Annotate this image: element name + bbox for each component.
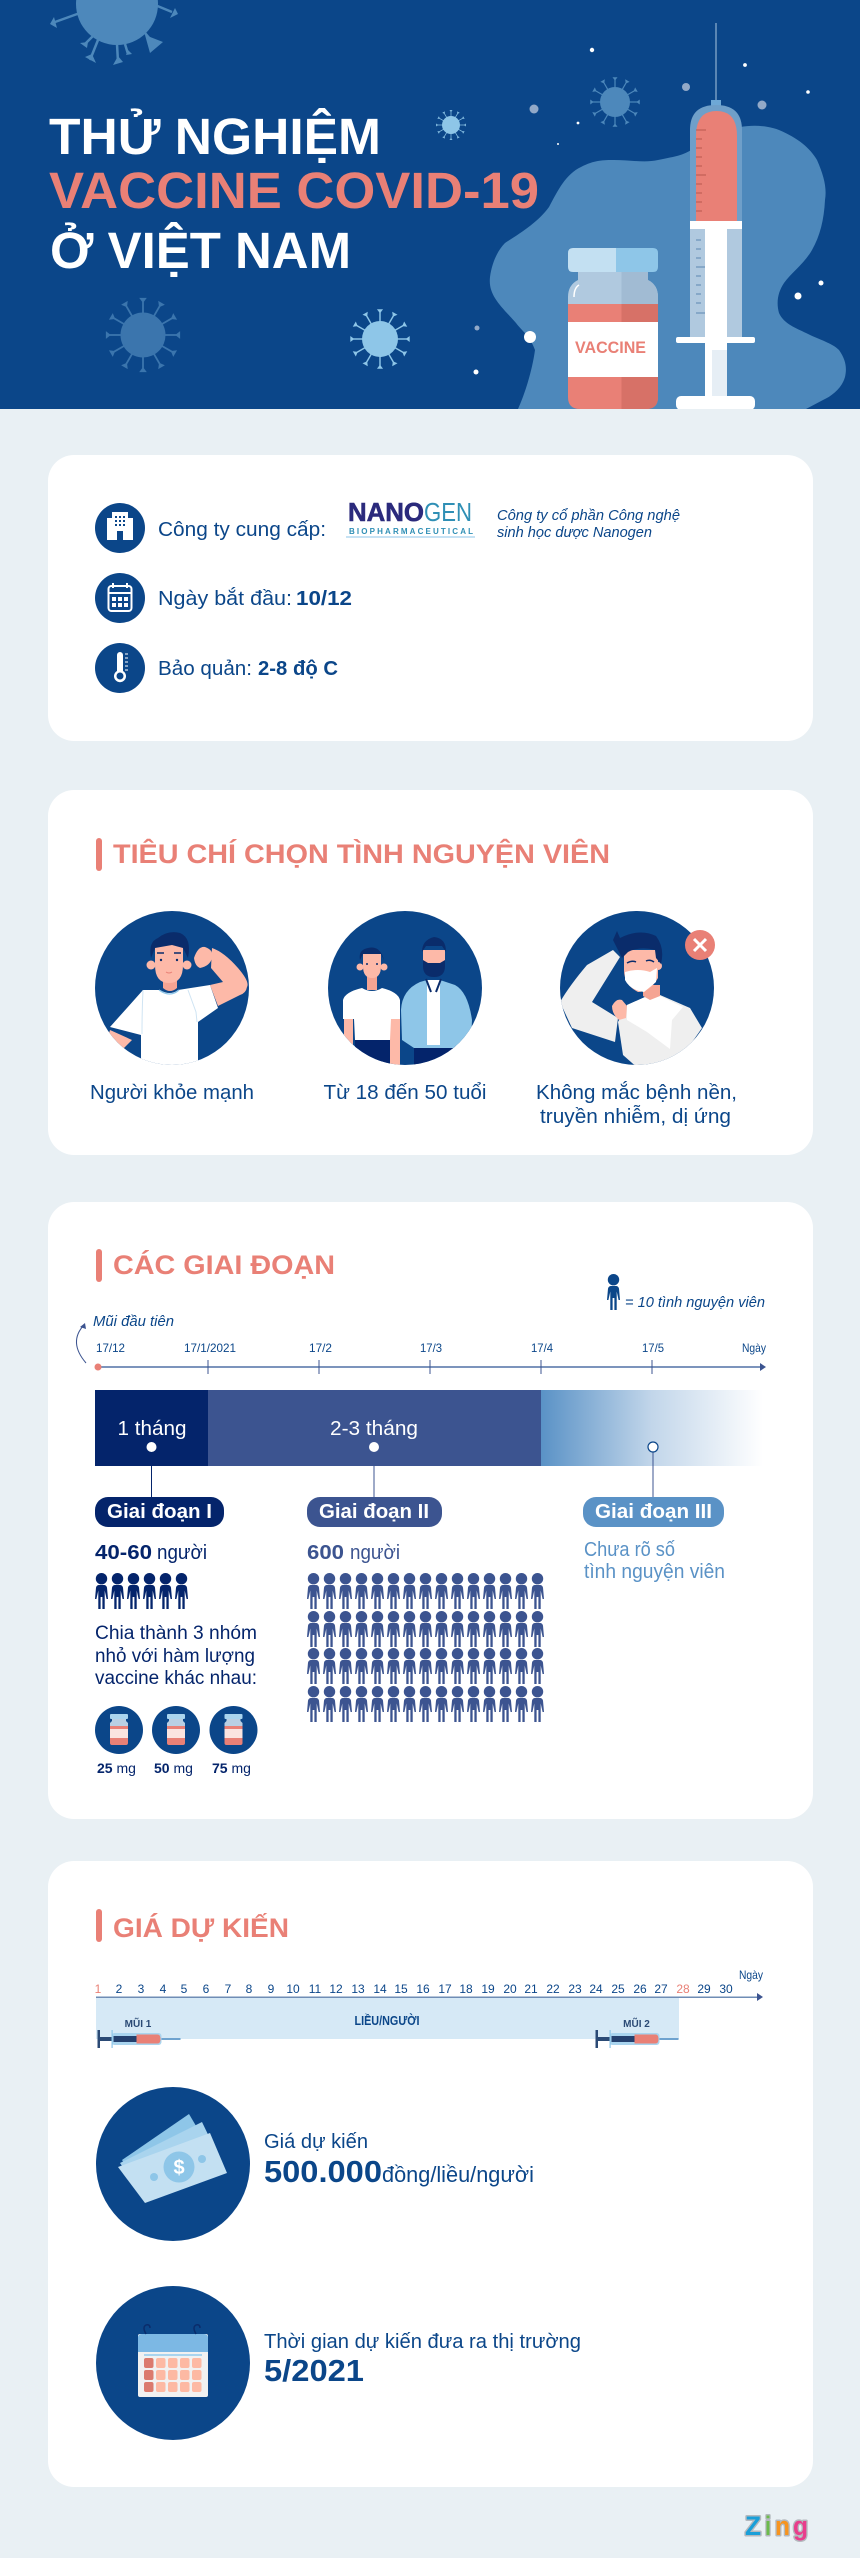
- dose schedule chart: 10: [286, 1982, 300, 1996]
- dose schedule chart: 9: [268, 1982, 275, 1996]
- logo: Zing: Z: [745, 2511, 761, 2541]
- phase II count: [307, 1542, 400, 1564]
- date axis: 17/5: [642, 1341, 664, 1355]
- heading: GIÁ DỰ KIẾN: [113, 1912, 289, 1943]
- icon: wall calendar: [96, 2286, 250, 2440]
- phase II count: người: [350, 1542, 400, 1564]
- virus: lower centre: [350, 309, 410, 369]
- dose schedule chart: 17: [438, 1982, 452, 1996]
- price text: đồng/liều/người: [382, 2162, 534, 2187]
- dose schedule chart: 16: [416, 1982, 430, 1996]
- heading: TIÊU CHÍ CHỌN TÌNH NGUYỆN VIÊN: [113, 838, 610, 869]
- dose schedule chart: 24: [589, 1982, 603, 1996]
- pill: phase I: [95, 1497, 224, 1527]
- phase 2: [307, 1497, 544, 1722]
- dose schedule chart: 7: [225, 1982, 232, 1996]
- date axis: [94, 1341, 766, 1374]
- dose 2 marker: [596, 2017, 678, 2048]
- dose schedule chart: 4: [160, 1982, 167, 1996]
- first dose note: Mũi đầu tiên: [93, 1313, 174, 1330]
- icon: banknotes: [96, 2087, 250, 2241]
- title: VACCINE COVID-19: [49, 162, 539, 219]
- legend: person equals ten volunteers: = 10 tình nguyện viên: [625, 1294, 765, 1311]
- dose schedule chart: 15: [394, 1982, 408, 1996]
- label: no conditions: [536, 1081, 737, 1128]
- price text: Giá dự kiến: [264, 2131, 368, 2153]
- pictogram: phase II people: [307, 1573, 544, 1722]
- panel: company info: [48, 455, 813, 741]
- logo: Zing: i: [765, 2511, 771, 2541]
- phase II count: 600: [307, 1542, 344, 1564]
- dose schedule chart: 30: [719, 1982, 733, 1996]
- dose schedule chart: Ngày: [739, 1968, 763, 1982]
- icon: building: [95, 503, 145, 553]
- virus: top left: [50, 0, 178, 65]
- phase duration bar: 1 tháng: [118, 1418, 186, 1440]
- blob backdrop: [490, 126, 846, 409]
- pictogram: phase I people: [95, 1573, 188, 1609]
- phase 3: [583, 1497, 725, 1583]
- illustration: healthy man: [95, 911, 249, 1070]
- date axis: Ngày: [742, 1341, 766, 1355]
- date axis: 17/4: [531, 1341, 553, 1355]
- start date: [158, 587, 352, 610]
- dose schedule chart: 28: [676, 1982, 690, 1996]
- phase I description: [95, 1623, 257, 1689]
- dose icons: [95, 1706, 258, 1776]
- dose schedule chart: 2: [116, 1982, 123, 1996]
- pill: phase II: Giai đoạn II: [319, 1501, 429, 1523]
- phase III note: tình nguyện viên: [584, 1561, 725, 1583]
- phase I count: 40-60: [95, 1542, 152, 1564]
- dose schedule chart: 20: [503, 1982, 517, 1996]
- logo: Nanogen: BIOPHARMACEUTICAL: [349, 527, 473, 536]
- icon: calendar: [95, 573, 145, 623]
- storage: [158, 658, 338, 680]
- dose 2 marker: MŨI 2: [623, 2017, 650, 2030]
- phase I count: người: [157, 1542, 207, 1564]
- title: THỬ NGHIỆM: [49, 107, 381, 165]
- company full name: sinh học dược Nanogen: [497, 524, 652, 541]
- company full name: [497, 507, 680, 541]
- legend: person equals ten volunteers: [607, 1274, 765, 1311]
- dose schedule chart: 25: [611, 1982, 625, 1996]
- logo: Nanogen: [346, 497, 475, 538]
- dose 1 marker: MŨI 1: [125, 2017, 152, 2030]
- dose schedule chart: 22: [546, 1982, 560, 1996]
- icon: thermometer: [95, 643, 145, 693]
- dose schedule chart: 27: [654, 1982, 668, 1996]
- company full name: Công ty cổ phần Công nghệ: [497, 507, 680, 524]
- dose icons: 50 mg: [154, 1760, 193, 1776]
- panel: volunteer criteria: [48, 790, 813, 1155]
- dose schedule chart: 5: [181, 1982, 188, 1996]
- start date: 10/12: [296, 588, 352, 610]
- company label: Công ty cung cấp:: [158, 519, 326, 541]
- dose icons: 25 mg: [97, 1760, 136, 1776]
- dose schedule chart: 8: [246, 1982, 253, 1996]
- title: Ở VIỆT NAM: [50, 221, 351, 279]
- logo: Zing: [745, 2511, 808, 2541]
- dose schedule chart: 23: [568, 1982, 582, 1996]
- icon: banknotes: $: [173, 2157, 185, 2179]
- storage: 2-8 độ C: [258, 658, 338, 680]
- dose schedule chart: [95, 1968, 763, 2048]
- dose schedule chart: 26: [633, 1982, 647, 1996]
- phase I count: [95, 1542, 207, 1564]
- first dose note: [76, 1313, 174, 1363]
- logo: Nanogen: NANO: [348, 497, 424, 527]
- virus: lower left: [106, 298, 180, 372]
- phase duration bar: 2-3 tháng: [330, 1418, 418, 1440]
- dose schedule chart: 13: [351, 1982, 365, 1996]
- icon: not allowed badge: [685, 930, 715, 960]
- start date: Ngày bắt đầu:: [158, 587, 292, 610]
- dose schedule chart: 29: [697, 1982, 711, 1996]
- date axis: 17/1/2021: [184, 1341, 236, 1355]
- dose icons: 75 mg: [212, 1760, 251, 1776]
- date axis: 17/12: [96, 1341, 125, 1355]
- vaccine vial: VACCINE: [575, 338, 646, 357]
- label: no conditions: Không mắc bệnh nền,: [536, 1081, 737, 1104]
- logo: Zing: n: [775, 2511, 790, 2541]
- phase III note: Chưa rõ số: [584, 1539, 675, 1561]
- pill: phase II: [307, 1497, 442, 1527]
- virus: upper right: [590, 77, 640, 127]
- dose schedule chart: 18: [459, 1982, 473, 1996]
- dose schedule chart: 21: [524, 1982, 538, 1996]
- virus: small centre: [436, 110, 466, 140]
- price text: 500.000: [264, 2154, 382, 2189]
- heading: CÁC GIAI ĐOẠN: [113, 1249, 335, 1280]
- dose 1 marker: [98, 2017, 180, 2048]
- price text: [264, 2131, 534, 2189]
- dose schedule chart: 14: [373, 1982, 387, 1996]
- phase I description: vaccine khác nhau:: [95, 1668, 257, 1689]
- label: no conditions: truyền nhiễm, dị ứng: [540, 1105, 731, 1128]
- logo: Zing: g: [793, 2511, 808, 2541]
- logo: Nanogen: GEN: [424, 497, 472, 527]
- label: healthy: Người khỏe mạnh: [90, 1082, 254, 1104]
- dose schedule chart: 1: [95, 1982, 102, 1996]
- panel: expected price: [48, 1861, 813, 2487]
- dose schedule chart: LIỀU/NGƯỜI: [354, 2013, 420, 2028]
- phase 1: [95, 1497, 258, 1776]
- label: age: Từ 18 đến 50 tuổi: [324, 1082, 486, 1104]
- storage: Bảo quản:: [158, 658, 252, 680]
- date axis: 17/3: [420, 1341, 442, 1355]
- pill: phase III: Giai đoạn III: [595, 1501, 712, 1523]
- pill: phase I: Giai đoạn I: [107, 1501, 212, 1523]
- illustration: sick man in mask: [560, 911, 715, 1070]
- date axis: 17/2: [309, 1341, 332, 1355]
- phase I description: nhỏ với hàm lượng: [95, 1646, 255, 1667]
- market date text: [264, 2331, 581, 2388]
- panel: trial phases: [48, 1202, 813, 1819]
- dose schedule chart: 12: [329, 1982, 343, 1996]
- market date text: Thời gian dự kiến đưa ra thị trường: [264, 2331, 581, 2353]
- title: [49, 107, 539, 279]
- phase I description: Chia thành 3 nhóm: [95, 1623, 257, 1644]
- floating dots: [474, 48, 824, 375]
- dose schedule chart: 3: [138, 1982, 145, 1996]
- dose schedule chart: 6: [203, 1982, 210, 1996]
- dose schedule chart: 19: [481, 1982, 495, 1996]
- vaccine vial: [568, 248, 658, 409]
- illustration: two men of different ages: [328, 911, 482, 1070]
- syringe: [676, 23, 755, 410]
- dose schedule chart: 11: [309, 1982, 322, 1996]
- phase III note: [584, 1539, 725, 1583]
- pill: phase III: [583, 1497, 724, 1527]
- market date text: 5/2021: [264, 2353, 364, 2388]
- phase duration bar: [95, 1390, 763, 1497]
- header banner: [0, 0, 860, 410]
